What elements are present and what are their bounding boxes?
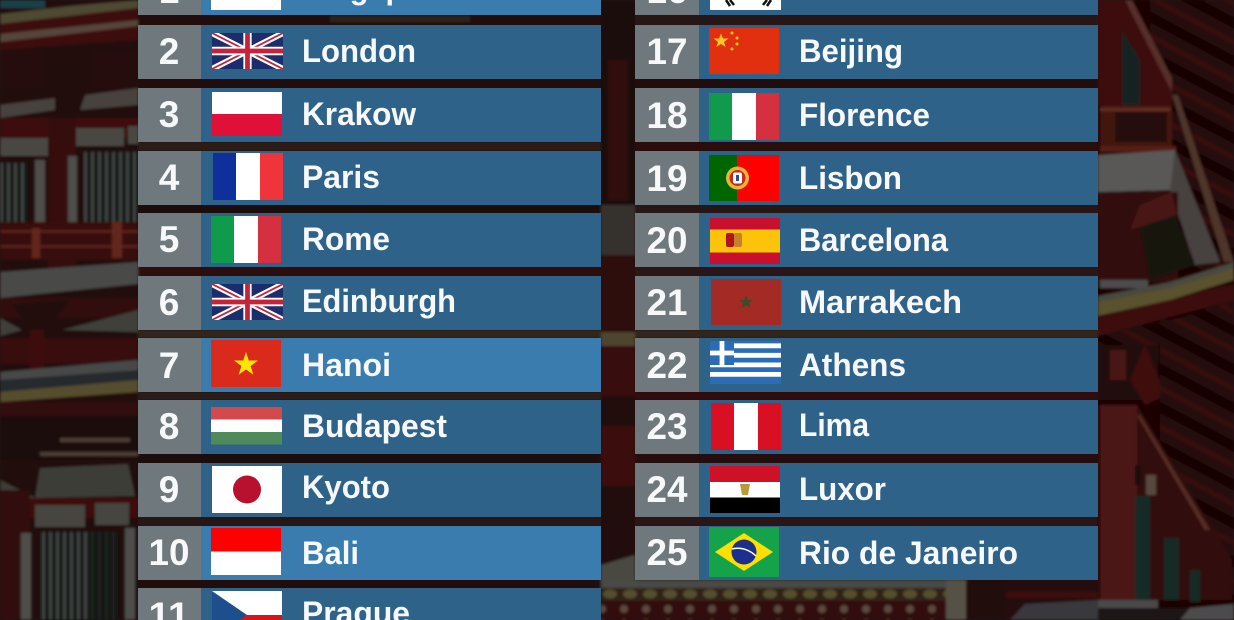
flag: Morocco [711, 279, 781, 325]
city: Luxor: Luxor [799, 471, 886, 507]
flag: South Korea [710, 0, 781, 10]
row 17: Beijing [635, 25, 1098, 79]
rank 9: 9 [159, 469, 179, 510]
rank 19: 19 [646, 158, 688, 199]
gaps between rows [138, 15, 1098, 588]
rank 23: 23 [646, 406, 688, 447]
flag: Peru [711, 403, 781, 450]
row 24: Luxor [635, 463, 1098, 517]
row 4: Paris [138, 151, 601, 205]
city: Budapest: Budapest [302, 408, 447, 444]
row 6: Edinburgh [138, 276, 601, 330]
ranking column: 1 to 11 [138, 0, 601, 620]
flag: United Kingdom [212, 33, 283, 69]
rank 20: 20 [646, 220, 688, 261]
row 8: Budapest [138, 400, 601, 454]
rank 25: 25 [646, 532, 688, 573]
flag: Brazil [709, 527, 779, 577]
row 19: Lisbon [635, 151, 1098, 205]
right facade [1098, 0, 1234, 620]
row 23: Lima [635, 400, 1098, 454]
rank 21: 21 [646, 282, 688, 323]
flag: United Kingdom [212, 284, 283, 320]
rank 5: 5 [159, 219, 179, 260]
rank 17: 17 [646, 31, 688, 72]
city: Edinburgh: Edinburgh [302, 283, 456, 319]
row 18: Florence [635, 88, 1098, 142]
flag: Portugal [709, 155, 779, 201]
city: Marrakech: Marrakech [799, 284, 962, 320]
city: Rio de Janeiro: Rio de Janeiro [799, 535, 1018, 571]
city: London: London [302, 33, 416, 69]
ranking column: 16 to 25 [635, 0, 1098, 580]
city: Athens: Athens [799, 347, 906, 383]
row 2: London [138, 25, 601, 79]
row 5: Rome [138, 213, 601, 267]
row 1: Singapore [138, 0, 601, 15]
rank 24: 24 [646, 469, 688, 510]
flag: Vietnam [211, 340, 281, 387]
rank 3: 3 [159, 94, 179, 135]
city: Kyoto: Kyoto [302, 469, 390, 505]
row 9: Kyoto [138, 463, 601, 517]
row 16: Seoul [635, 0, 1098, 15]
rank 4: 4 [159, 157, 180, 198]
flag: Italy [211, 216, 281, 263]
bottom roof [601, 580, 1234, 620]
rank 22: 22 [646, 345, 688, 386]
city: Florence: Florence [799, 97, 930, 133]
city: Lima: Lima [799, 407, 869, 443]
row 25: Rio de Janeiro [635, 526, 1098, 580]
row 22: Athens [635, 338, 1098, 392]
flag: Poland [212, 92, 282, 136]
city: Barcelona: Barcelona [799, 222, 948, 258]
rank 2: 2 [159, 31, 179, 72]
flag: China [709, 28, 779, 74]
center gaps [601, 0, 635, 620]
city: Krakow: Krakow [302, 96, 416, 132]
flag: Greece [710, 341, 781, 384]
flag: Spain [710, 218, 780, 264]
rank 7: 7 [159, 345, 179, 386]
flag: Singapore [211, 0, 281, 10]
city: Paris: Paris [302, 159, 380, 195]
rank 18: 18 [646, 95, 688, 136]
flag: Hungary [211, 407, 282, 444]
rank 6: 6 [159, 282, 179, 323]
row 21: Marrakech [635, 276, 1098, 330]
flag: Indonesia [211, 528, 281, 575]
row 7: Hanoi [138, 338, 601, 392]
city: Hanoi: Hanoi [302, 347, 391, 383]
city: Beijing: Beijing [799, 33, 903, 69]
rank 10: 10 [148, 532, 190, 573]
city: Bali: Bali [302, 535, 359, 571]
rank 8: 8 [159, 406, 179, 447]
left facade [0, 0, 138, 620]
flag: Egypt [710, 466, 780, 513]
flag: Italy [709, 93, 779, 140]
flag: France [213, 153, 283, 200]
city: Rome: Rome [302, 221, 390, 257]
row 11: Prague [138, 588, 601, 620]
city: Lisbon: Lisbon [799, 160, 902, 196]
flag: Czech Republic [212, 591, 282, 620]
row 20: Barcelona [635, 213, 1098, 267]
row 10: Bali [138, 526, 601, 580]
row 3: Krakow [138, 88, 601, 142]
flag: Japan [212, 466, 282, 513]
